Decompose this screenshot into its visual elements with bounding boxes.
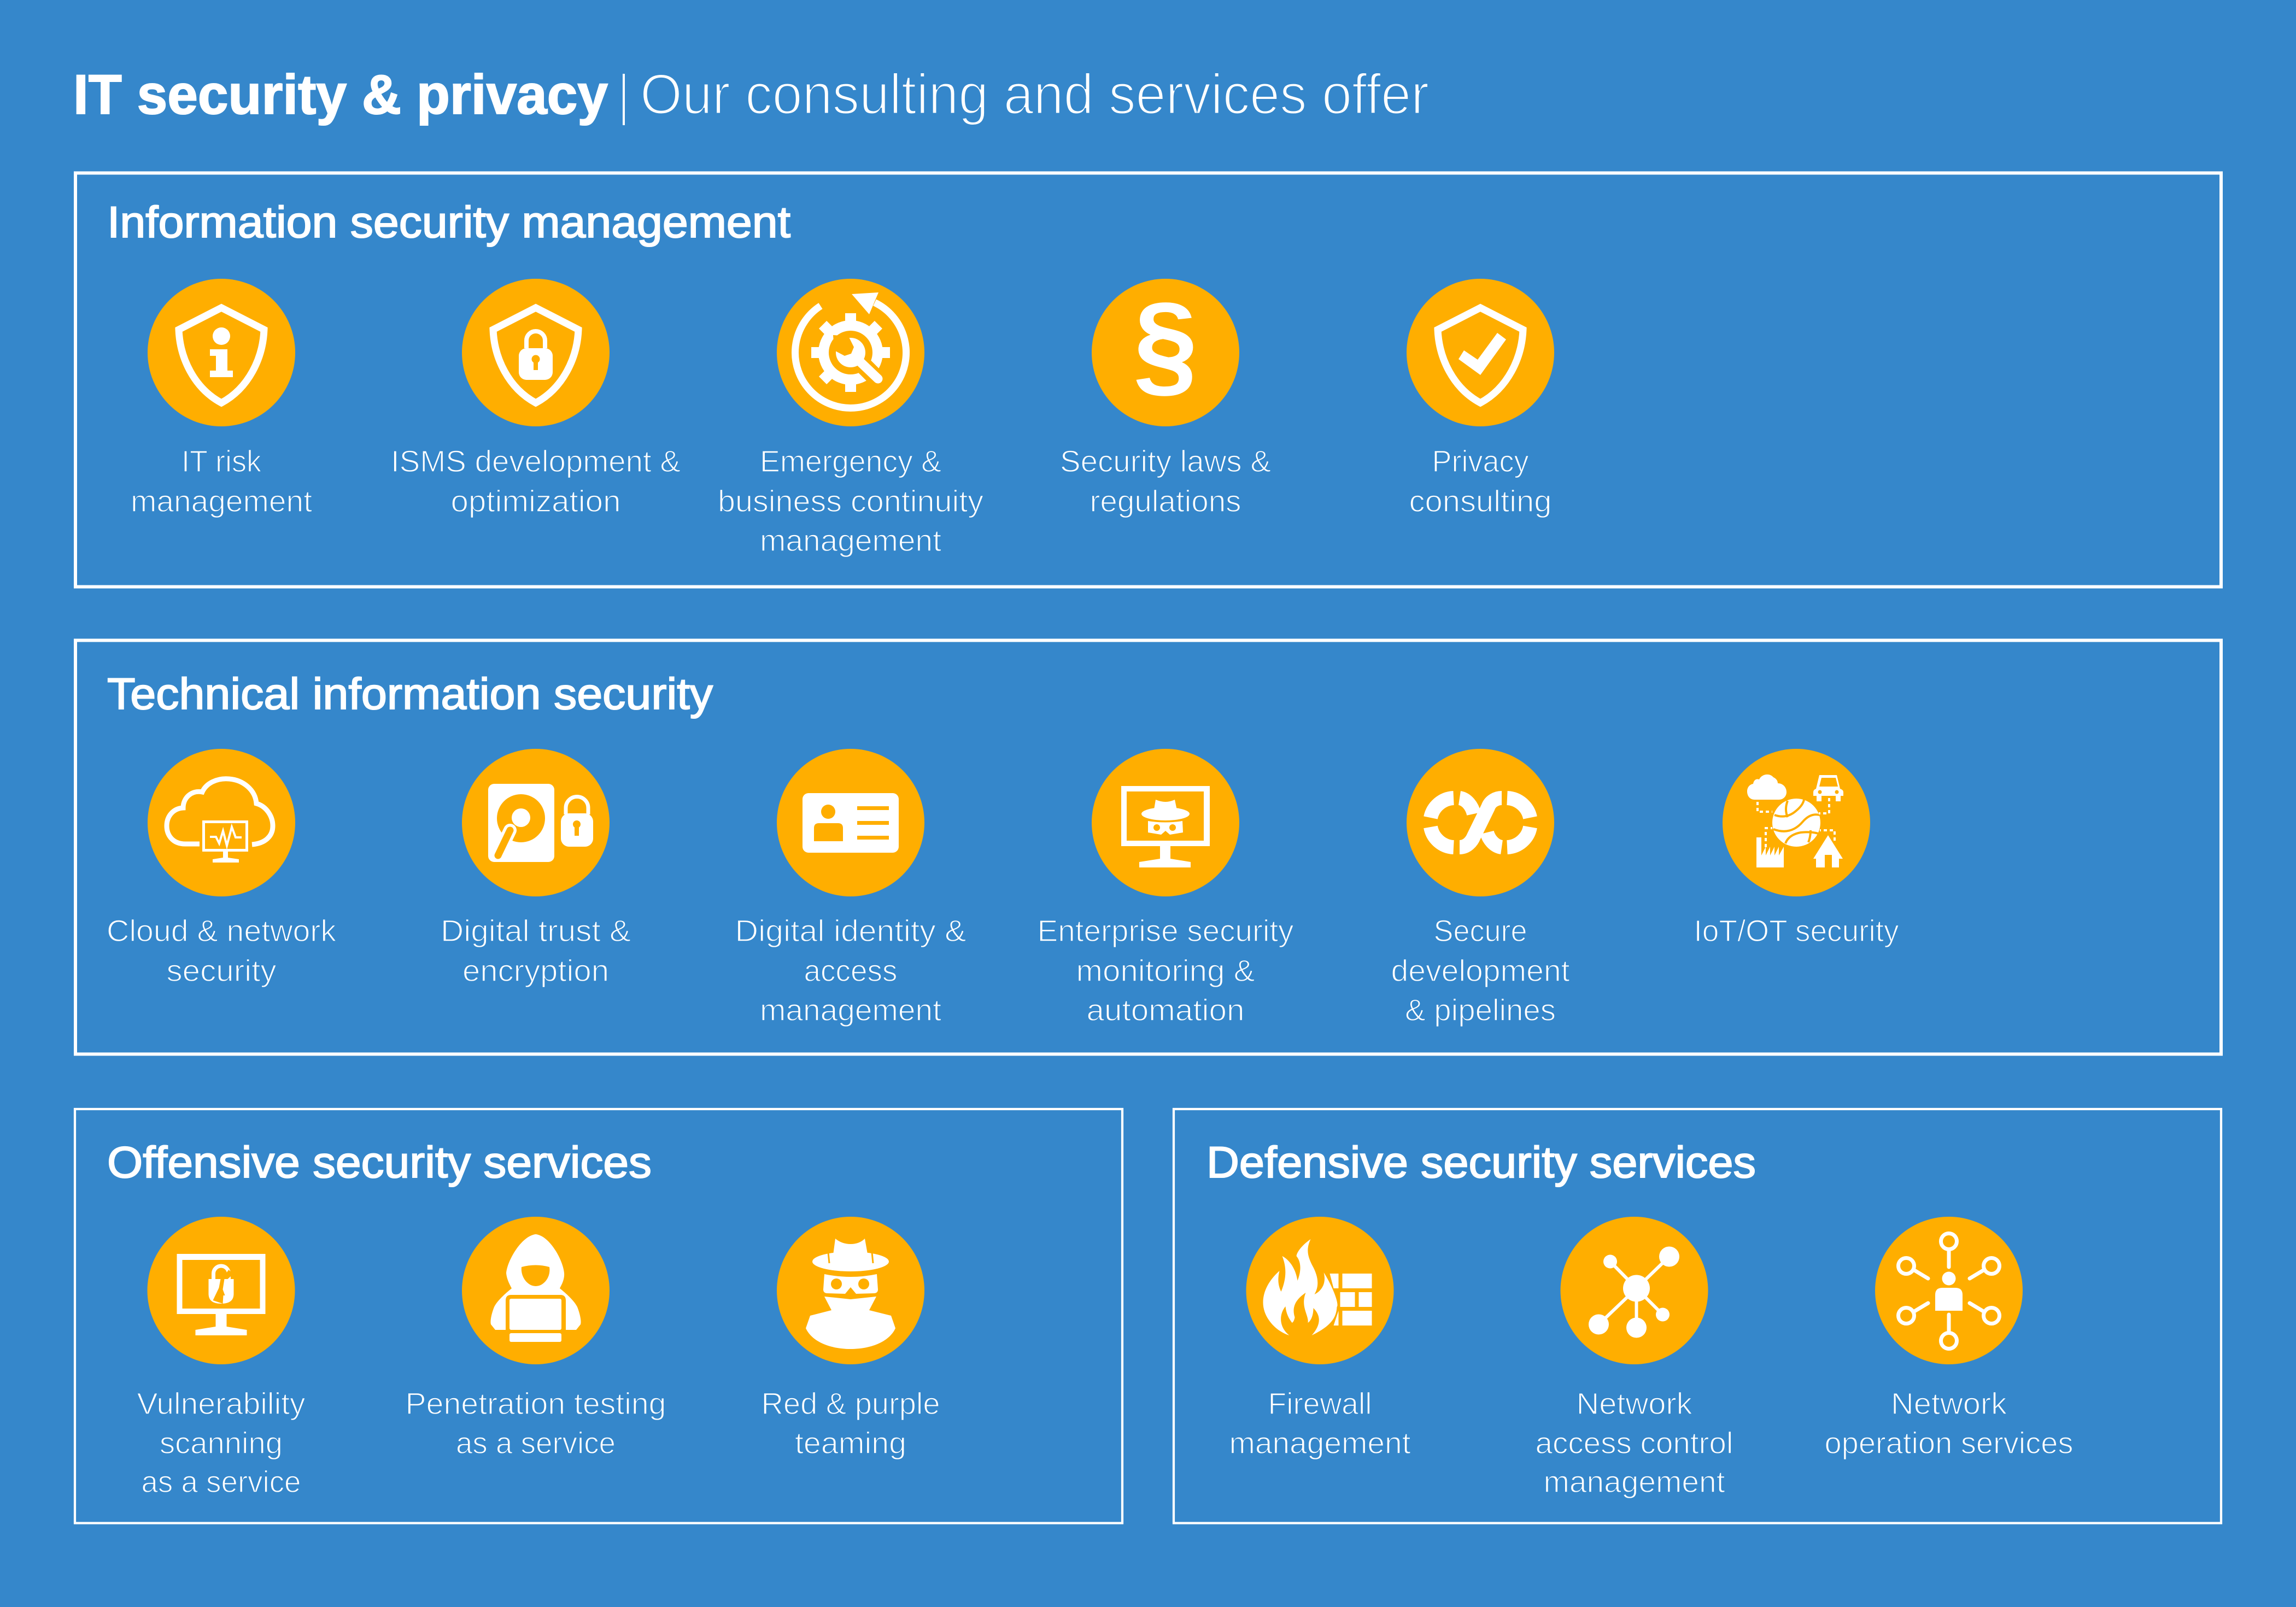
item: privacy consulting: consulting	[1409, 484, 1551, 518]
icon: monitor with spy	[1121, 786, 1210, 867]
icon: hard disk and padlock	[488, 784, 593, 862]
item: network operation services: operation services	[1825, 1426, 2073, 1460]
panel: offensive security services	[75, 1109, 1122, 1523]
title: IT security & privacy	[73, 63, 608, 126]
item: digital identity and access management: access	[804, 953, 898, 988]
item: digital trust and encryption	[441, 749, 631, 988]
item: emergency and business continuity	[718, 279, 983, 558]
icon: ID card	[803, 793, 899, 853]
icon: gear with wrench and circular arrow	[795, 292, 906, 408]
item: security laws: regulations	[1090, 484, 1241, 518]
item: vulnerability scanning: scanning	[160, 1426, 283, 1460]
item: ISMS development: ISMS development &	[391, 444, 681, 478]
item: security laws: Security laws &	[1060, 444, 1271, 478]
icon: section sign: §	[1133, 278, 1198, 408]
icon: person with connected nodes	[1898, 1233, 2000, 1349]
item: digital identity and access management: Digital identity &	[735, 913, 967, 948]
heading: technical information security: Technical information security	[107, 670, 713, 719]
icon: monitor with broken lock	[177, 1254, 266, 1335]
icon: hooded hacker with laptop	[490, 1234, 581, 1342]
item: cloud and network security: security	[166, 953, 277, 988]
icon: shield with check	[1438, 308, 1523, 403]
item: secure development: Secure	[1433, 913, 1527, 948]
item: vulnerability scanning: Vulnerability	[137, 1386, 305, 1421]
item: IT risk management: IT risk	[181, 444, 262, 478]
icon: hub and spoke network	[1589, 1246, 1679, 1338]
item: red and purple teaming	[761, 1217, 940, 1460]
heading: information security management: Information security management	[107, 198, 790, 247]
item: firewall management: management	[1229, 1426, 1411, 1460]
item: cloud and network security	[107, 749, 337, 988]
title: Our consulting and services offer	[640, 63, 1429, 126]
item: ISMS development: optimization	[450, 484, 621, 518]
icon: shield with info	[179, 308, 264, 403]
title	[73, 63, 1429, 126]
item: IoT/OT security: IoT/OT security	[1694, 913, 1899, 948]
item: IoT/OT security	[1694, 749, 1899, 948]
item: digital identity and access management: management	[760, 993, 941, 1027]
item: network access control: management	[1544, 1464, 1725, 1499]
item: digital identity and access management	[735, 749, 967, 1027]
item: cloud and network security: Cloud & network	[107, 913, 337, 948]
icon: connected cloud, car, factory, house and globe	[1747, 775, 1843, 867]
panel: defensive security services	[1174, 1109, 2221, 1523]
item: vulnerability scanning: as a service	[141, 1464, 301, 1499]
item: enterprise security monitoring	[1038, 749, 1293, 1027]
item: network access control: Network	[1577, 1386, 1693, 1421]
icon: flame and brick wall	[1263, 1239, 1372, 1335]
item: secure development	[1391, 749, 1570, 1027]
item: red and purple teaming: teaming	[795, 1426, 906, 1460]
item: enterprise security monitoring: monitoring &	[1076, 953, 1255, 988]
item: IT risk management	[131, 279, 312, 518]
item: secure development: & pipelines	[1405, 993, 1556, 1027]
item: enterprise security monitoring: automation	[1087, 993, 1244, 1027]
item: penetration testing	[406, 1217, 666, 1460]
item: emergency and business continuity: Emergency &	[760, 444, 941, 478]
item: firewall management: Firewall	[1268, 1386, 1372, 1421]
item: secure development: development	[1391, 953, 1570, 988]
item: digital trust and encryption: Digital trust &	[441, 913, 631, 948]
item: IT risk management: management	[131, 484, 312, 518]
item: security laws	[1060, 278, 1271, 518]
icon: cloud with monitor	[167, 779, 273, 863]
icon: spy	[806, 1239, 895, 1349]
icon: shield with lock	[493, 308, 578, 403]
item: network access control: access control	[1535, 1426, 1733, 1460]
item: vulnerability scanning	[137, 1217, 305, 1499]
panel: technical information security	[75, 641, 2221, 1054]
item: network access control	[1535, 1217, 1733, 1499]
item: emergency and business continuity: business continuity	[718, 484, 983, 518]
item: penetration testing: as a service	[456, 1426, 616, 1460]
item: digital trust and encryption: encryption	[462, 953, 609, 988]
panel: information security management	[75, 173, 2221, 587]
item: ISMS development	[391, 279, 681, 518]
item: emergency and business continuity: management	[760, 523, 941, 558]
item: red and purple teaming: Red & purple	[761, 1386, 940, 1421]
icon: infinity arrows	[1431, 798, 1530, 847]
item: enterprise security monitoring: Enterprise security	[1038, 913, 1293, 948]
item: penetration testing: Penetration testing	[406, 1386, 666, 1421]
heading: offensive security services: Offensive security services	[107, 1138, 652, 1187]
heading: defensive security services: Defensive security services	[1206, 1138, 1756, 1187]
item: privacy consulting: Privacy	[1432, 444, 1528, 478]
item: privacy consulting	[1407, 279, 1554, 518]
item: network operation services: Network	[1891, 1386, 2007, 1421]
item: network operation services	[1825, 1217, 2073, 1460]
item: firewall management	[1229, 1217, 1411, 1460]
